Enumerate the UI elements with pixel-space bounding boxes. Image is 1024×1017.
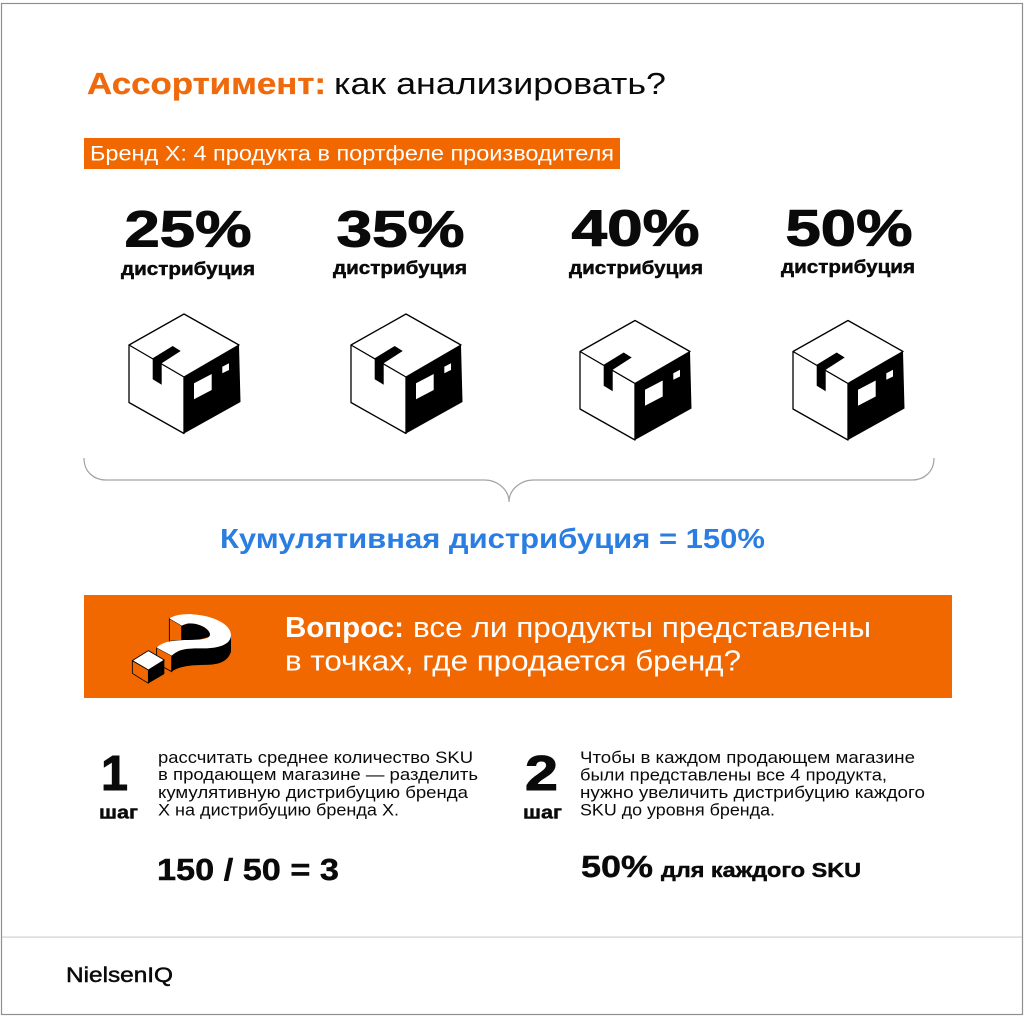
product 2 distribution [333,200,467,278]
step 2 number: 2 [525,747,558,801]
title: Ассортимент: [87,67,326,101]
product 3 distribution: дистрибуция [569,258,703,278]
footer divider [2,936,1022,938]
step 2 result: для каждого SKU [661,860,861,882]
step 2 result [581,849,861,884]
icon: box 1 [129,314,240,434]
step 1 label: шаг [99,802,139,822]
product 3 distribution [569,200,703,278]
product 1 distribution [121,200,255,279]
logo: NielsenIQ: NielsenIQ [66,964,173,987]
step 1 number: 1 [101,747,128,801]
title: как анализировать? [334,67,666,101]
icon: box 2 [351,314,462,434]
cumulative distribution result: Кумулятивная дистрибуция = 150% [220,523,765,554]
step 1 description: рассчитать среднее количество SKU [158,749,473,767]
question panel [84,595,952,698]
title [87,67,666,101]
product 3 distribution: 40% [572,200,700,256]
step 2 description: нужно увеличить дистрибуцию каждого [580,784,925,802]
icon: box 4 [793,320,904,440]
product 2 distribution: 35% [336,200,464,258]
step 2 description: Чтобы в каждом продающем магазине [580,749,915,767]
subtitle banner: Бренд X: 4 продукта в портфеле производителя [90,142,614,166]
product 2 distribution: дистрибуция [333,258,467,278]
step 2 description [580,749,925,820]
product 4 distribution: дистрибуция [781,257,915,277]
step 1 description: в продающем магазине — разделить [158,766,478,784]
step 1 description: X на дистрибуцию бренда X. [158,802,399,820]
product 1 distribution: 25% [124,200,252,258]
step 2 [523,747,925,884]
step 1 [99,747,478,887]
product 4 distribution [781,200,915,277]
question text: Вопрос: [285,612,404,644]
subtitle banner [84,138,620,169]
curly brace [84,458,934,502]
product 4 distribution: 50% [786,200,912,256]
question text: в точках, где продается бренд? [285,646,741,678]
question text [285,612,871,678]
step 1 description: кумулятивную дистрибуцию бренда [158,784,469,802]
step 2 result: 50% [581,849,653,884]
step 1 description [158,749,478,820]
product 1 distribution: дистрибуция [121,259,255,279]
step 1 formula: 150 / 50 = 3 [157,852,339,887]
step 2 description: были представлены все 4 продукта, [580,766,887,784]
step 2 description: SKU до уровня бренда. [580,802,775,820]
icon: 3D question mark [132,614,231,683]
step 2 label: шаг [523,802,563,822]
question text: все ли продукты представлены [413,612,871,644]
icon: box 3 [580,320,692,440]
